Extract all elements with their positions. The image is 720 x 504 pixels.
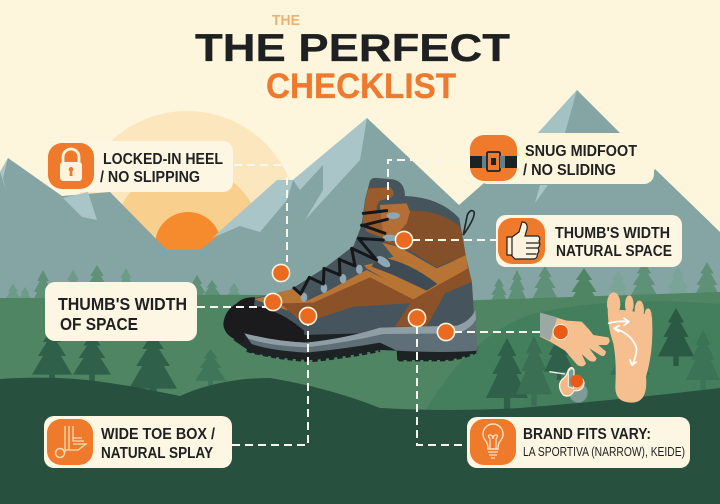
boot eyelets — [301, 212, 400, 302]
hand and foot illustration — [540, 292, 652, 403]
card: thumb's width of space: THUMB'S WIDTH — [58, 294, 187, 314]
label — [555, 225, 672, 260]
sun with rings — [76, 111, 298, 333]
icon: toe box lines — [47, 419, 93, 465]
card: wide toe box — [44, 416, 232, 468]
boot brown side — [280, 268, 472, 327]
dashed connectors — [197, 160, 542, 445]
hand dot — [553, 324, 568, 340]
title — [195, 12, 510, 106]
foot arrows — [609, 318, 637, 365]
icon: thumbs up — [498, 218, 545, 264]
card: thumb's width natural space — [496, 215, 682, 267]
boot outsole — [233, 330, 478, 360]
label: / NO SLIDING — [523, 162, 616, 179]
label: SNUG MIDFOOT — [525, 143, 637, 160]
distant trees — [2, 262, 720, 316]
boot midsole — [244, 310, 477, 353]
label: LOCKED-IN HEEL — [103, 151, 223, 168]
dark foreground — [0, 378, 720, 504]
green hills — [0, 292, 720, 504]
boot laces — [294, 211, 387, 294]
boot upper base — [247, 178, 475, 337]
title: checklist: CHECKLIST — [266, 67, 456, 106]
mountains — [0, 90, 720, 320]
foot with toes — [607, 292, 652, 403]
boot collar brown — [383, 211, 466, 267]
hotspot dots — [264, 231, 455, 341]
hand — [540, 313, 610, 366]
label: WIDE TOE BOX / — [101, 426, 216, 443]
card: thumb's width of space: OF SPACE — [60, 314, 138, 334]
title: the perfect: THE PERFECT — [195, 27, 510, 70]
card: snug midfoot — [470, 134, 654, 184]
boot loop — [463, 211, 474, 235]
card: brand fits vary — [467, 417, 690, 468]
boot tan vamp — [254, 270, 423, 317]
label: NATURAL SPLAY — [101, 445, 214, 462]
boot sole lugs — [247, 351, 476, 361]
boot slate panel — [372, 257, 437, 291]
boot lace gusset — [295, 240, 393, 300]
mid forest trees — [32, 308, 720, 410]
hiking boot — [223, 178, 478, 361]
label — [100, 151, 223, 186]
label: THUMB'S WIDTH — [555, 225, 670, 242]
card: thumb's width of space — [45, 282, 197, 341]
label — [523, 426, 685, 459]
boot toe cap — [223, 297, 305, 343]
icon: light bulb — [470, 419, 516, 465]
label: / NO SLIPPING — [100, 169, 200, 186]
icon: padlock — [48, 143, 94, 189]
icon: belt buckle — [470, 135, 517, 181]
label — [101, 426, 216, 462]
card: locked-in heel — [48, 141, 233, 192]
label — [523, 143, 637, 179]
label: NATURAL SPACE — [556, 243, 672, 260]
wrist cuff — [540, 313, 557, 341]
title: the small: THE — [272, 12, 300, 29]
small ankle detail — [549, 367, 588, 403]
label: BRAND FITS VARY: — [523, 426, 651, 443]
